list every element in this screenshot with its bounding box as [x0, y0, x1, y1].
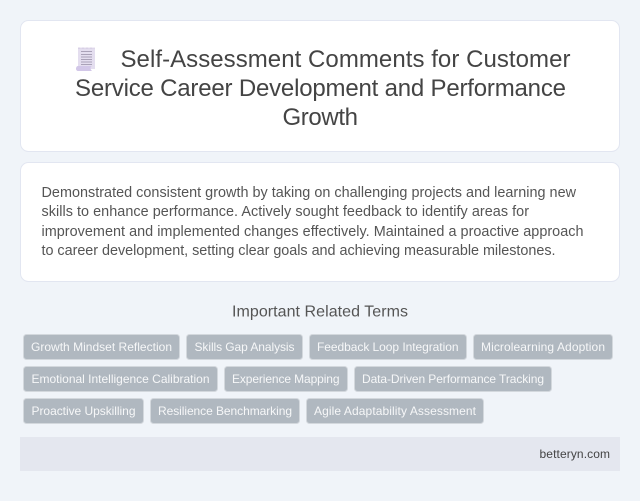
chip: Growth Mindset Reflection — [24, 334, 180, 360]
text block: self-assessment paragraph: improvement and implemented changes effectively. Maintained a proactive approach — [42, 224, 584, 240]
panel: title card — [20, 20, 620, 152]
chip: Experience Mapping: Experience Mapping — [232, 372, 340, 386]
chip: Resilience Benchmarking: Resilience Benchmarking — [158, 404, 292, 418]
chip: Emotional Intelligence Calibration — [24, 366, 218, 392]
chip: Data-Driven Performance Tracking: Data-Driven Performance Tracking — [362, 372, 544, 386]
footer bar — [20, 437, 620, 471]
title: Growth — [282, 104, 358, 131]
chip: Emotional Intelligence Calibration: Emotional Intelligence Calibration — [32, 372, 210, 386]
footer site name: betteryn.com — [540, 447, 610, 461]
chip: Growth Mindset Reflection: Growth Mindset Reflection — [31, 340, 172, 354]
chip: Proactive Upskilling: Proactive Upskilling — [32, 404, 136, 418]
icon: receipt scroll — [76, 48, 95, 71]
panel: related term chips — [24, 334, 612, 424]
text block: self-assessment paragraph — [42, 185, 584, 259]
panel: summary card — [20, 162, 620, 282]
title: Service Career Development and Performance — [75, 75, 566, 102]
text block: self-assessment paragraph: Demonstrated consistent growth by taking on challenging projects and learning new — [42, 185, 577, 201]
title: Self-Assessment Comments for Customer — [120, 46, 570, 73]
chip: Feedback Loop Integration: Feedback Loop Integration — [317, 340, 458, 354]
chip: Microlearning Adoption: Microlearning Adoption — [481, 340, 605, 354]
chip: Experience Mapping — [224, 366, 348, 392]
chip: Skills Gap Analysis: Skills Gap Analysis — [194, 340, 294, 354]
chip: Agile Adaptability Assessment: Agile Adaptability Assessment — [314, 404, 477, 418]
heading: related terms: Important Related Terms — [232, 304, 408, 320]
chip: Feedback Loop Integration — [310, 334, 466, 360]
chip: Skills Gap Analysis — [186, 334, 302, 360]
chip: Proactive Upskilling — [24, 398, 144, 424]
text block: self-assessment paragraph: skills to enhance performance. Actively sought feedback to identify areas for — [42, 204, 529, 220]
chip: Data-Driven Performance Tracking — [354, 366, 552, 392]
chip: Resilience Benchmarking — [150, 398, 300, 424]
title — [75, 46, 570, 131]
chip: Microlearning Adoption — [474, 334, 612, 360]
text block: self-assessment paragraph: to career development, setting clear goals and achieving measurable milestones. — [42, 243, 556, 259]
chip: Agile Adaptability Assessment — [306, 398, 484, 424]
